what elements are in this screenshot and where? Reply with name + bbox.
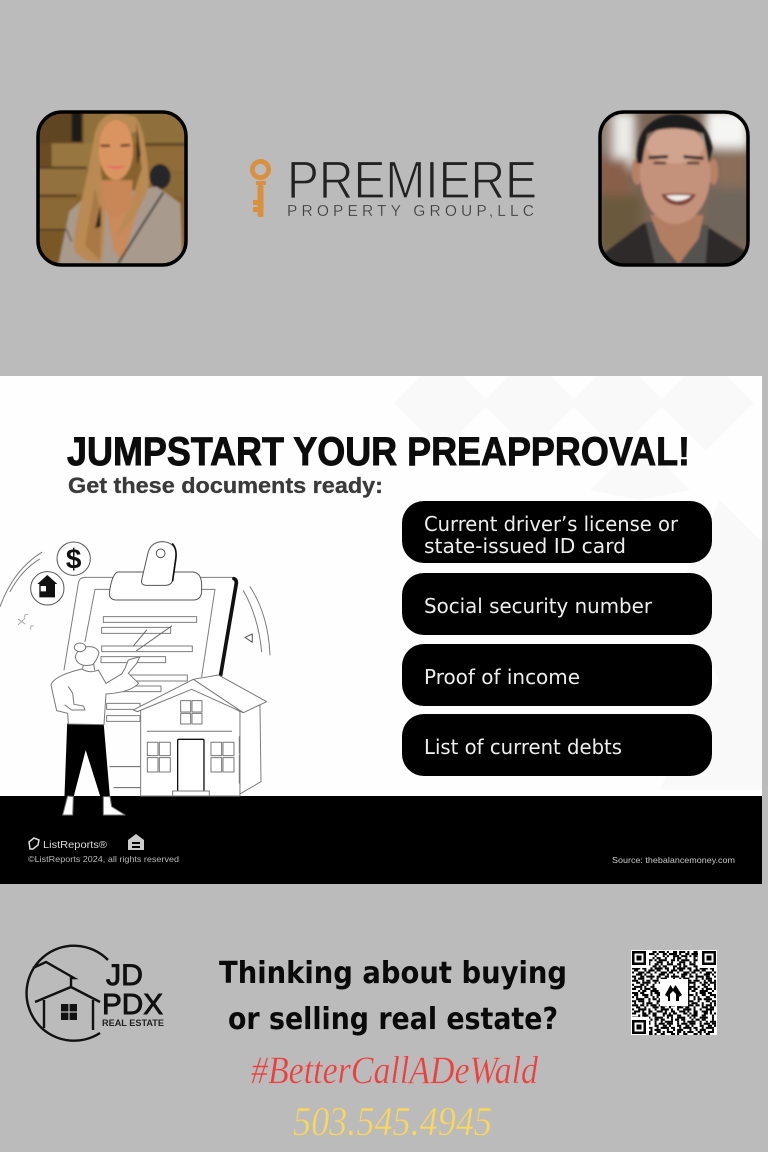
pill: driver's license: Current driver’s license or xyxy=(424,512,679,536)
logo: JD PDX Real Estate xyxy=(27,946,164,1041)
footer brand: ListReports xyxy=(28,834,179,864)
woman figure xyxy=(51,643,140,815)
logo: JD PDX Real Estate: REAL ESTATE xyxy=(102,1018,164,1029)
call to action text xyxy=(219,956,567,1037)
logo: Premiere Property Group xyxy=(250,151,537,220)
panel: preapproval card xyxy=(0,355,762,884)
dollar badge: $ xyxy=(66,544,82,575)
logo: Premiere Property Group: PROPERTY GROUP,LLC xyxy=(287,203,534,220)
pill: proof of income: Proof of income xyxy=(424,665,580,689)
house xyxy=(133,675,267,796)
logo: JD PDX Real Estate: JD xyxy=(106,959,143,992)
footer source: Source: thebalancemoney.com xyxy=(612,855,735,865)
pill: social security xyxy=(402,573,712,635)
subheading: Get these documents ready: xyxy=(68,473,383,498)
footer band xyxy=(0,796,762,884)
pill: proof of income xyxy=(402,644,712,706)
pill: list of debts xyxy=(402,714,712,776)
call to action text: or selling real estate? xyxy=(228,1002,558,1037)
footer brand: ListReports: ListReports® xyxy=(43,839,107,851)
icon: QR center double-house mark xyxy=(665,985,682,1001)
photo: man, right portrait xyxy=(598,110,750,267)
logo: Premiere Property Group: PREMIERE xyxy=(287,151,537,210)
illustration: woman presenting checklist and house xyxy=(0,542,270,815)
clipboard xyxy=(64,542,237,788)
pill: list of debts: List of current debts xyxy=(424,735,622,759)
hashtag: #BetterCallADeWald xyxy=(251,1049,538,1092)
decorative motion arcs and sparkles xyxy=(0,552,270,655)
QR code xyxy=(631,950,717,1035)
call to action text: Thinking about buying xyxy=(219,956,567,991)
icon: ListReports mark xyxy=(29,838,39,849)
icon: orange key xyxy=(250,159,271,217)
logo: JD PDX Real Estate: PDX xyxy=(102,989,163,1021)
icon: equal housing xyxy=(128,834,144,850)
pill: driver's license xyxy=(402,501,712,563)
pill: driver's license: state-issued ID card xyxy=(424,534,626,558)
pill: social security: Social security number xyxy=(424,594,653,618)
heading: JUMPSTART YOUR PREAPPROVAL! xyxy=(67,430,690,474)
footer brand: ListReports: ©ListReports 2024, all rights reserved xyxy=(28,854,179,864)
photo: woman, left portrait xyxy=(36,110,188,267)
dollar badge xyxy=(57,542,90,575)
house badge xyxy=(31,572,64,605)
phone number: 503.545.4945 xyxy=(293,1098,492,1144)
